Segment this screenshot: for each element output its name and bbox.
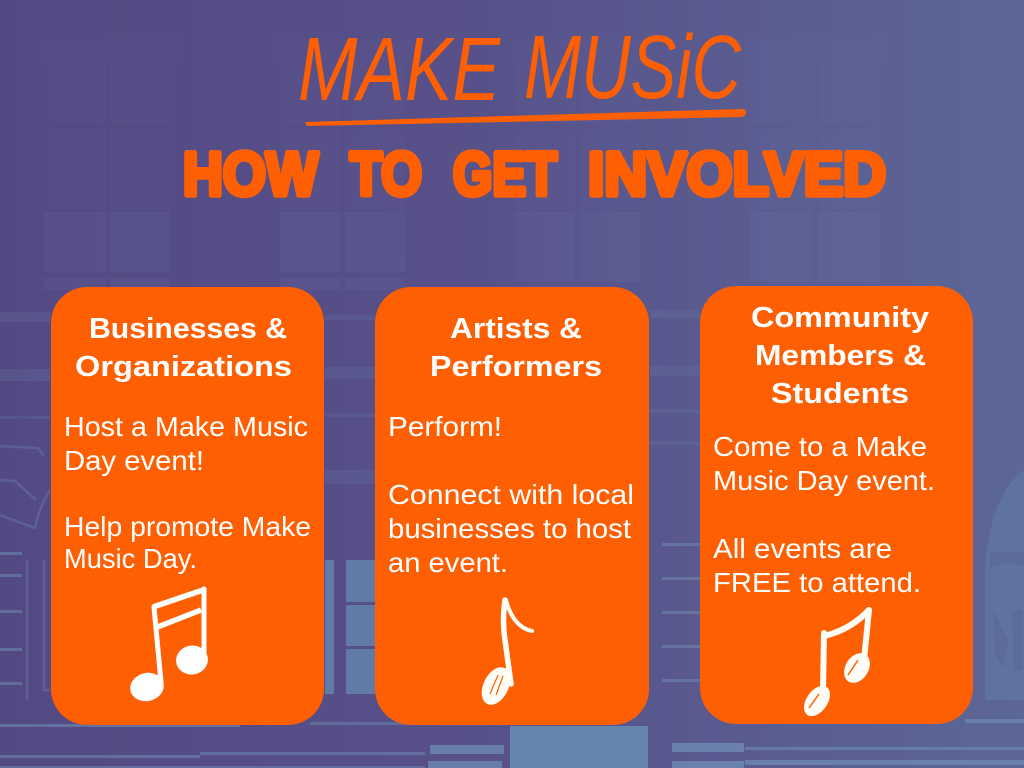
panel text: community: FREE to attend. [713, 567, 921, 598]
panel text: businesses [64, 411, 311, 574]
panel heading: community: Community [751, 302, 929, 334]
panel: businesses and organizations [51, 287, 324, 725]
panel heading: artists [430, 313, 602, 383]
underline stroke [305, 109, 746, 126]
heading: how to get involved: INVOLVED [588, 140, 886, 208]
panel text: artists: Perform! [388, 411, 502, 442]
panel heading: artists: Performers [430, 351, 602, 383]
title: Make Music [298, 18, 742, 120]
panel heading: community: Members & [755, 340, 926, 372]
heading: how to get involved [183, 140, 886, 208]
panel text: community [713, 431, 935, 598]
panel heading: artists: Artists & [450, 313, 582, 345]
heading: how to get involved: HOW [183, 140, 318, 208]
heading: how to get involved: GET [453, 140, 557, 208]
panel text: businesses: Day event! [64, 445, 204, 476]
heading: how to get involved: TO [350, 140, 422, 208]
panel heading: businesses [75, 313, 292, 383]
panel text: artists [388, 411, 634, 578]
panel: artists and performers [375, 287, 649, 725]
panel heading: community [751, 302, 929, 410]
panel heading: businesses: Businesses & [89, 313, 287, 345]
panel text: businesses: Music Day. [64, 543, 197, 574]
panel text: artists: businesses to host [388, 513, 631, 544]
panel heading: businesses: Organizations [75, 351, 292, 383]
left window and arch [0, 446, 50, 700]
right arch [985, 470, 1024, 700]
panel text: community: Come to a Make [713, 431, 927, 462]
center-left window [325, 560, 375, 694]
icon: beamed eighth notes [799, 610, 875, 721]
panel text: businesses: Host a Make Music [64, 411, 308, 442]
panel: community members and students [700, 286, 973, 724]
panel text: artists: Connect with local [388, 479, 634, 510]
icon: beamed sixteenth notes [127, 589, 210, 705]
title: Make Music: MUSiC [524, 18, 742, 118]
panel heading: community: Students [771, 378, 909, 410]
panel text: community: All events are [713, 533, 892, 564]
ground ledges [0, 719, 1024, 768]
icon: eighth note [476, 600, 532, 709]
panel text: artists: an event. [388, 547, 508, 578]
panel text: community: Music Day event. [713, 465, 935, 496]
panel text: businesses: Help promote Make [64, 511, 311, 542]
title: Make Music: MAKE [298, 20, 501, 120]
